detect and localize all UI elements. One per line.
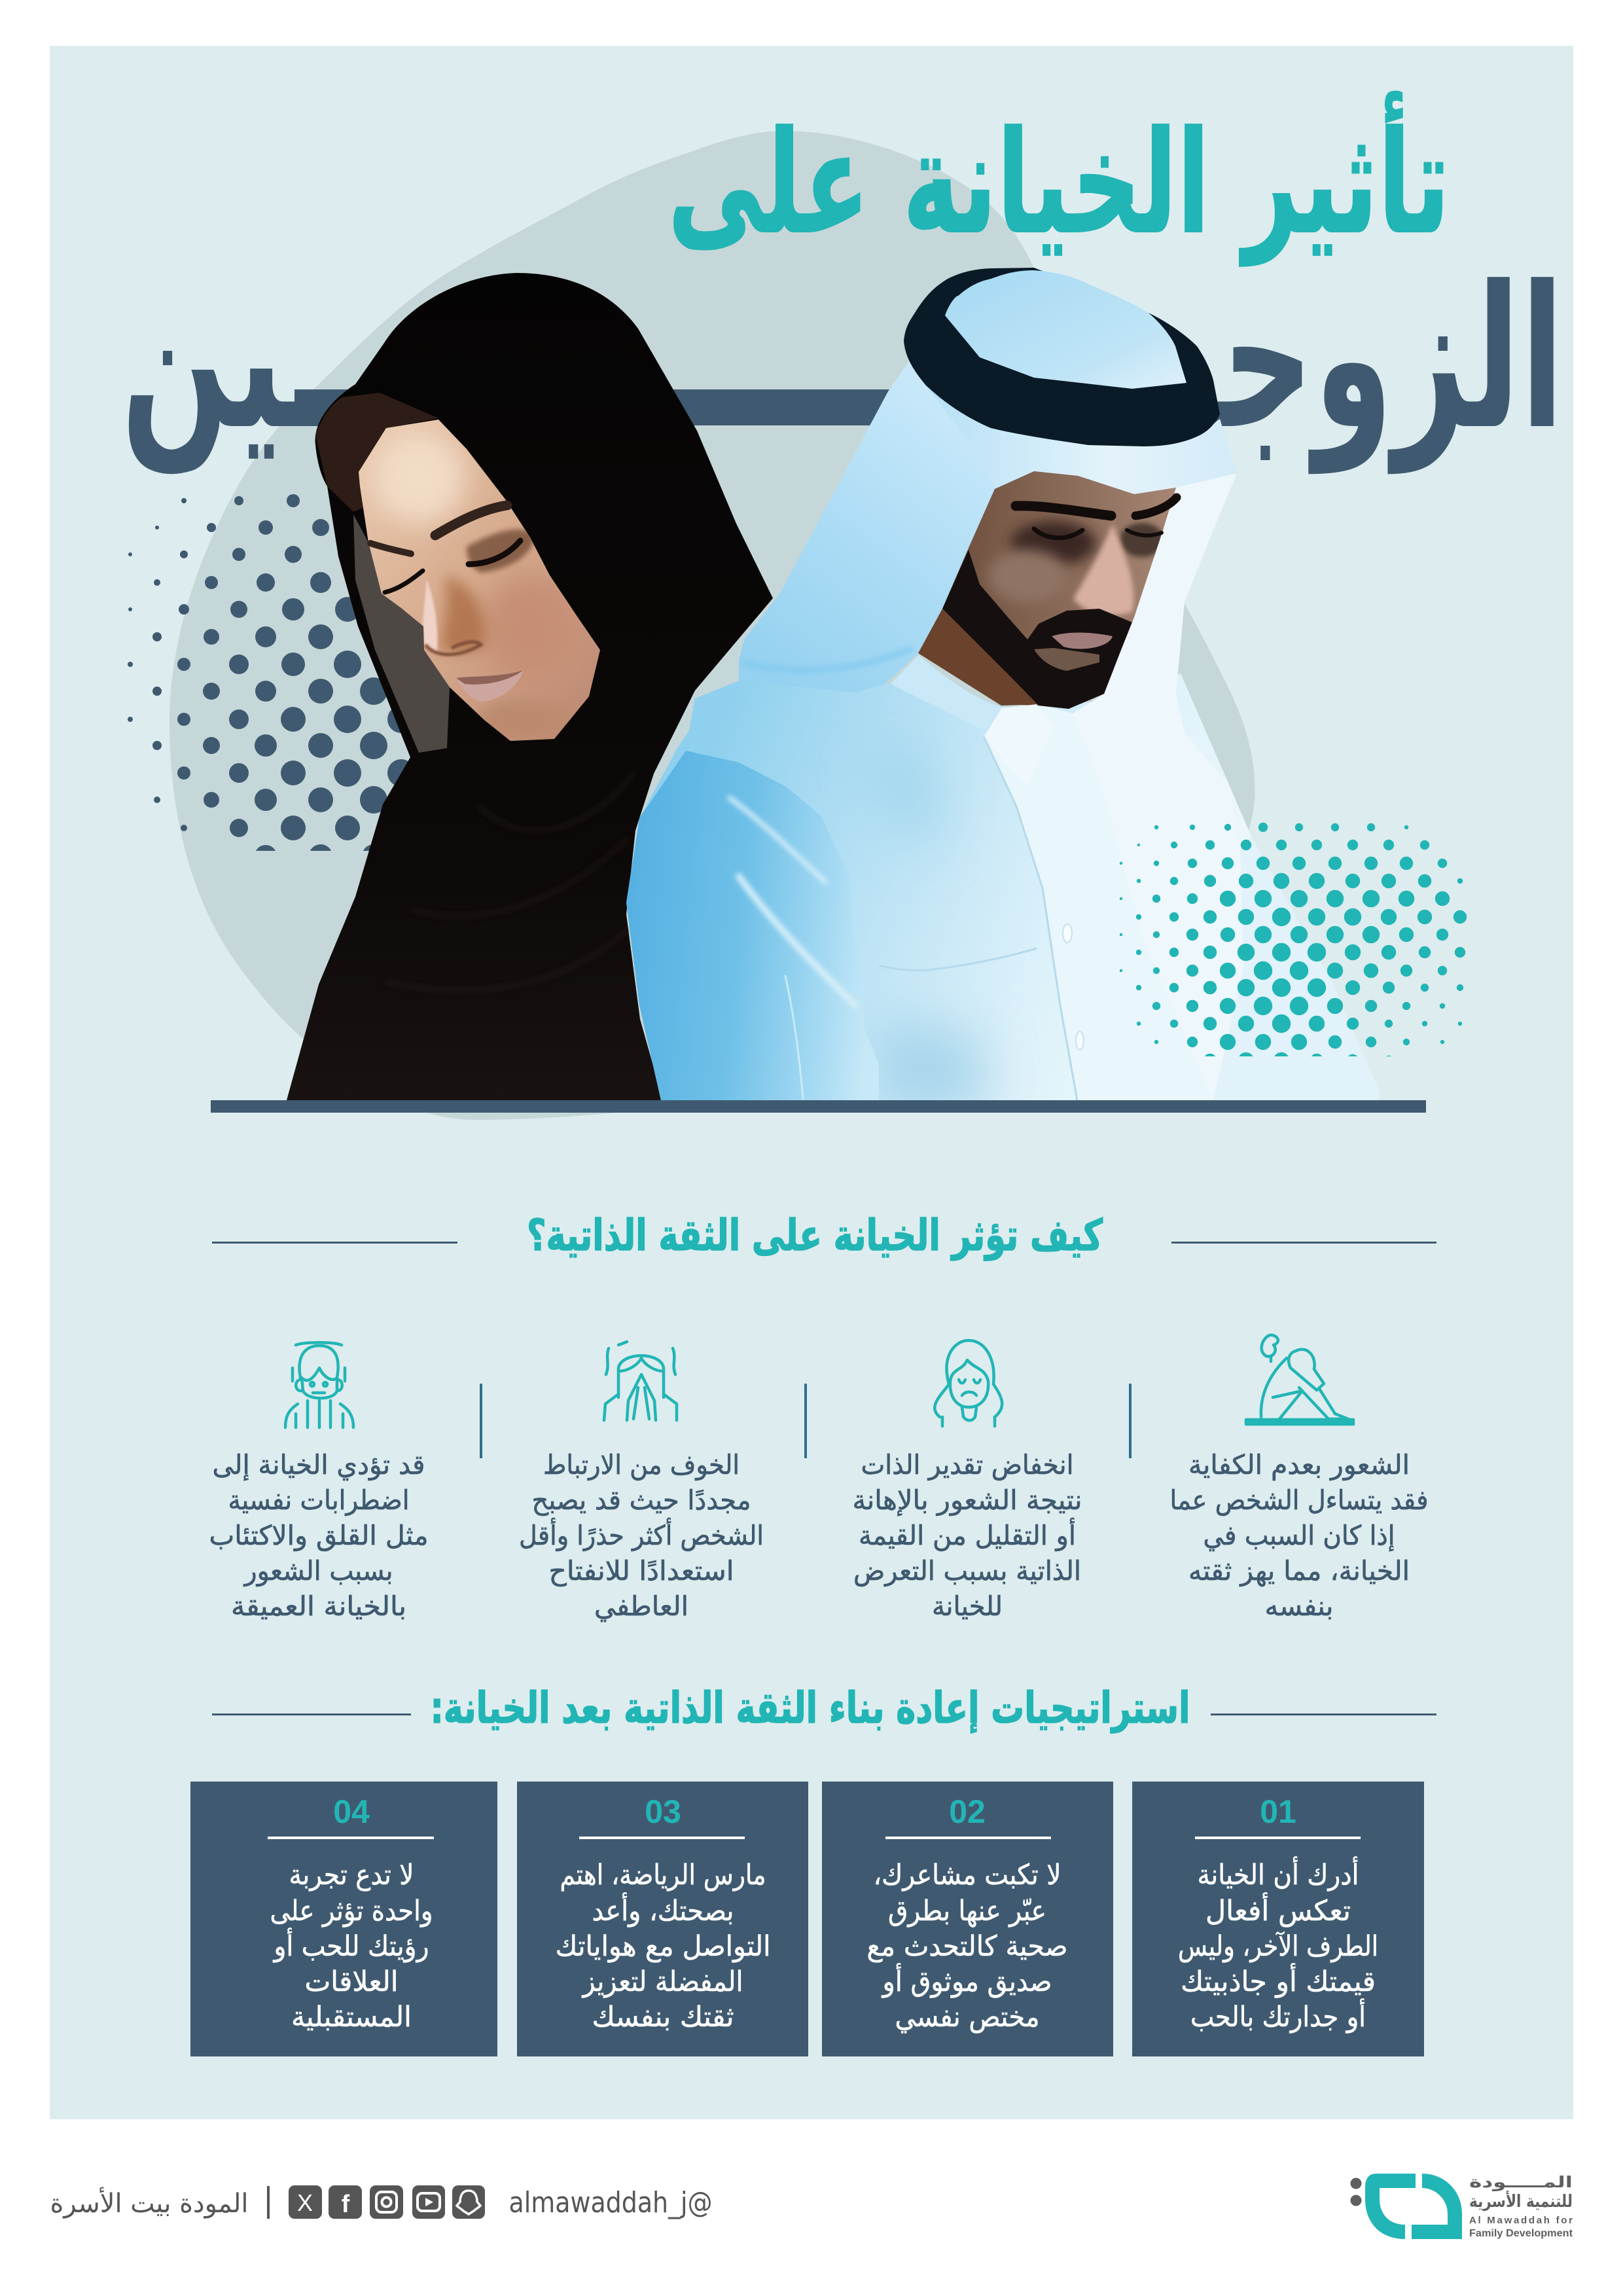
text block: low self esteem	[852, 1449, 1082, 1622]
right drape	[1073, 473, 1243, 1100]
text block: low self esteem: للخيانة	[932, 1590, 1003, 1622]
card 03: التواصل مع هواياتك	[555, 1930, 771, 1963]
logo	[1351, 2173, 1573, 2239]
nose	[1073, 524, 1133, 615]
card 03: 03	[645, 1793, 681, 1830]
card 04: المستقبلية	[291, 2001, 412, 2034]
card 03: بصحتك، وأعد	[592, 1892, 734, 1928]
text block: feeling of inadequacy	[1170, 1449, 1428, 1622]
card 01: قيمتك أو جاذبيتك	[1181, 1963, 1376, 1998]
card 03	[517, 1782, 808, 2056]
halftone dots: teal	[1120, 823, 1466, 1067]
face	[347, 412, 609, 746]
card 01: 01	[1260, 1793, 1296, 1830]
card 01: الطرف الآخر، وليس	[1178, 1930, 1378, 1963]
left headdress drape	[739, 361, 1034, 692]
background blob	[169, 131, 1255, 1120]
hijab	[287, 273, 773, 1100]
text block: feeling of inadequacy: إذا كان السبب في	[1203, 1520, 1395, 1552]
neck	[918, 609, 1039, 706]
footer separator	[267, 2186, 270, 2219]
eye shadow	[1011, 521, 1096, 565]
card 04: لا تدع تجربة	[289, 1859, 414, 1892]
icon: woman covering face	[604, 1342, 677, 1420]
text block: psychological disorders: مثل القلق والاكتئاب	[209, 1520, 428, 1551]
text block: psychological disorders: بالخيانة العميقة	[231, 1590, 406, 1622]
logo: Al Mawaddah for	[1469, 2215, 1573, 2226]
card 01	[1132, 1782, 1424, 2056]
left sleeve	[626, 751, 879, 1100]
icon: sad woman	[935, 1340, 1002, 1426]
placket top	[984, 704, 1054, 785]
text block: psychological disorders	[209, 1449, 428, 1622]
right eye socket	[467, 529, 533, 573]
halftone dots: dark	[128, 494, 415, 868]
heading: confidence: كيف تؤثر الخيانة على الثقة الذاتية؟	[527, 1210, 1103, 1261]
icon: instagram	[370, 2185, 403, 2219]
card 04: 04	[333, 1793, 370, 1830]
column dividers	[480, 1384, 1132, 1458]
cheek colour	[481, 576, 579, 681]
lips	[456, 670, 524, 702]
text block: fear of attachment	[519, 1449, 764, 1623]
icon: snapchat	[452, 2185, 485, 2219]
text block: psychological disorders: بسبب الشعور	[243, 1555, 393, 1587]
thobe buttons	[1012, 761, 1084, 1050]
heading: strategies: استراتيجيات إعادة بناء الثقة الذاتية بعد الخيانة:	[431, 1683, 1190, 1734]
icon: facebook: f	[342, 2191, 350, 2218]
title: line two: ـين	[121, 244, 332, 475]
card 04: العلاقات	[305, 1965, 398, 1998]
text block: low self esteem: الذاتية بسبب التعرض	[853, 1555, 1081, 1587]
title: line two	[121, 244, 1564, 475]
body folds	[864, 740, 988, 1113]
chin patch	[1034, 648, 1099, 671]
collar	[891, 655, 1001, 730]
nose ridge	[423, 579, 437, 651]
card 02: مختص نفسي	[895, 2001, 1039, 2034]
side shadow on nose	[440, 576, 485, 653]
text block: psychological disorders: قد تؤدي الخيانة إلى	[212, 1449, 425, 1480]
text block: fear of attachment: الخوف من الارتباط	[543, 1449, 740, 1480]
text block: feeling of inadequacy: بنفسه	[1264, 1590, 1334, 1622]
face	[936, 468, 1185, 713]
logo: للتنمية الأسرية	[1469, 2191, 1573, 2212]
card 02: لا تكبت مشاعرك،	[873, 1859, 1061, 1892]
headband cloth	[926, 386, 1237, 494]
hair	[315, 393, 438, 512]
head cap	[945, 270, 1186, 389]
beard	[942, 550, 1135, 713]
thobe body	[626, 673, 1379, 1100]
social icons	[289, 2185, 485, 2219]
text block: low self esteem: أو التقليل من القيمة	[859, 1518, 1076, 1551]
card 02	[822, 1782, 1113, 2056]
nose tip	[425, 642, 481, 655]
right lower arm	[1152, 836, 1379, 1100]
lips	[1052, 633, 1113, 649]
eyebrows	[370, 505, 507, 554]
card 02: صحية كالتحدث مع	[866, 1930, 1068, 1963]
logo: Family Development	[1469, 2228, 1573, 2239]
text block: low self esteem: نتيجة الشعور بالإهانة	[852, 1484, 1082, 1516]
text block: feeling of inadequacy: فقد يتساءل الشخص عما	[1170, 1484, 1428, 1516]
eyebrows	[1016, 497, 1177, 516]
card 02: 02	[949, 1793, 986, 1830]
drape shade	[743, 648, 913, 670]
card 02: عبّر عنها بطرق	[888, 1895, 1046, 1928]
logo: المـــــودة	[1469, 2173, 1573, 2191]
icon: X: X	[297, 2189, 313, 2216]
text block: feeling of inadequacy: الشعور بعدم الكفاية	[1188, 1449, 1410, 1480]
icon: X	[289, 2185, 322, 2219]
card 01: أو جدارتك بالحب	[1190, 1998, 1366, 2034]
card 01: أدرك أن الخيانة	[1198, 1856, 1359, 1892]
text block: fear of attachment: الشخص أكثر حذرًا وأقل	[519, 1518, 764, 1551]
base bar under photo	[211, 1100, 1426, 1113]
text block: fear of attachment: العاطفي	[594, 1590, 688, 1623]
man figure	[626, 268, 1379, 1113]
card 04: رؤيتك للحب أو	[273, 1928, 429, 1963]
icon: person sitting hugging knees	[1246, 1335, 1353, 1424]
card 04	[190, 1782, 497, 2056]
card 03: ثقتك بنفسك	[592, 2001, 734, 2034]
cheek	[988, 550, 1067, 602]
forehead light	[373, 432, 465, 524]
card 03: مارس الرياضة، اهتم	[560, 1859, 766, 1892]
text block: fear of attachment: مجددًا حيث قد يصبح	[531, 1484, 751, 1516]
footer handle: almawaddah_j@	[509, 2186, 712, 2219]
hijab folds	[386, 772, 635, 990]
sheer veil	[353, 514, 450, 753]
text block: psychological disorders: اضطرابات نفسية	[228, 1484, 410, 1516]
eyes	[1034, 529, 1162, 538]
text block: fear of attachment: استعدادًا للانفتاح	[548, 1555, 734, 1587]
sleeve highlights	[730, 798, 855, 1099]
footer tagline: المودة بيت الأسرة	[50, 2187, 249, 2219]
heading: confidence	[212, 1210, 1436, 1261]
icon: anxious man	[285, 1342, 353, 1427]
eyes	[385, 541, 520, 592]
icon: facebook	[329, 2185, 362, 2219]
agal ring	[904, 268, 1220, 446]
woman figure	[287, 273, 773, 1100]
chin shade	[478, 700, 569, 740]
card 04: واحدة تؤثر على	[270, 1895, 433, 1928]
front placket	[984, 704, 1213, 1100]
text block: low self esteem: انخفاض تقدير الذات	[861, 1449, 1073, 1480]
card 01: تعكس أفعال	[1205, 1892, 1351, 1928]
text block: feeling of inadequacy: الخيانة، مما يهز ثقته	[1188, 1555, 1410, 1587]
card 03: المفضلة لتعزيز	[582, 1965, 743, 1998]
icon: youtube	[412, 2185, 445, 2219]
card 02: صديق موثوق أو	[882, 1963, 1052, 1998]
